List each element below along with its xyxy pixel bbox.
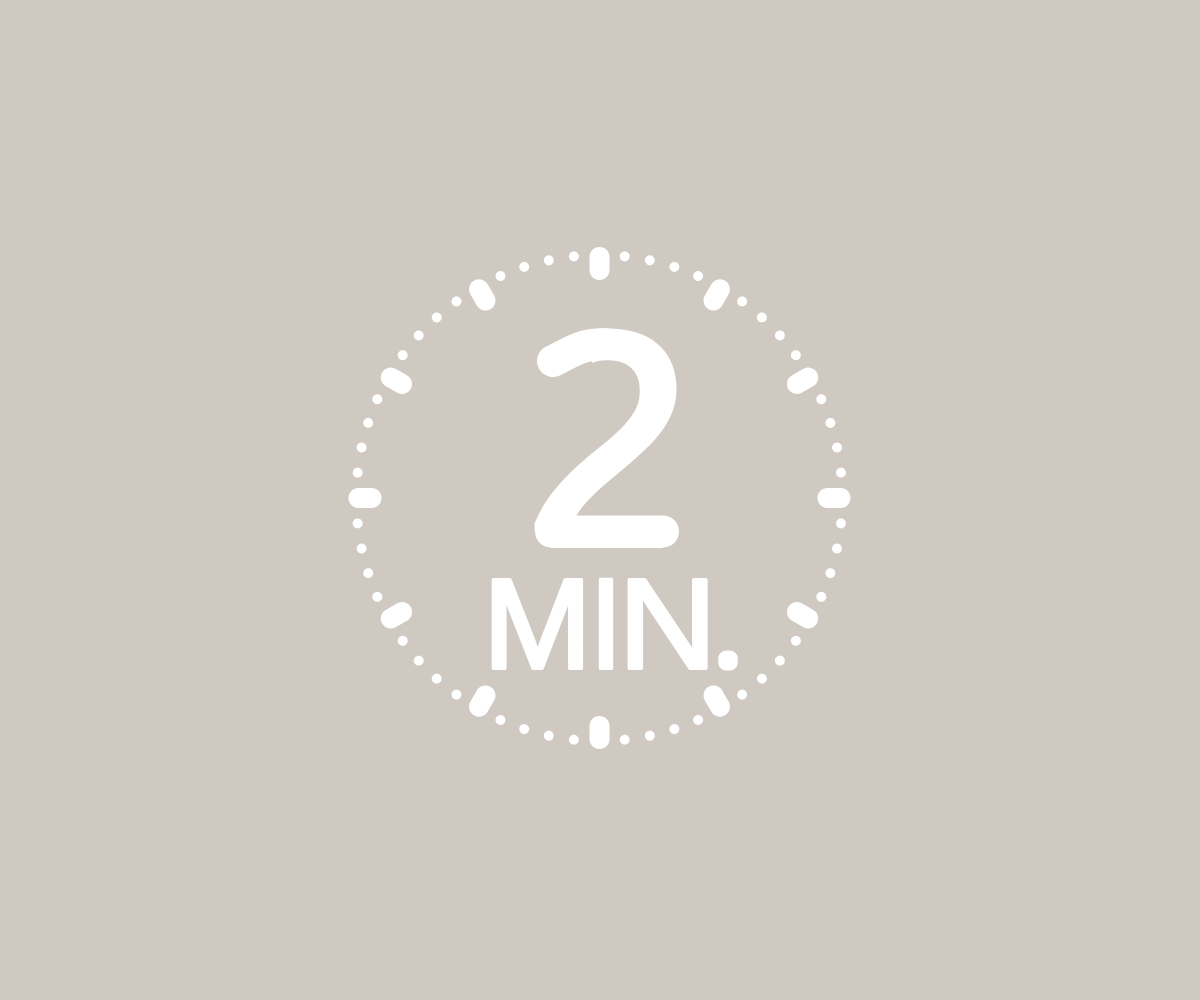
numeral: 2: 2 <box>524 273 690 607</box>
label: MIN.: I <box>590 552 622 695</box>
minute dots <box>352 251 846 745</box>
label: MIN.: N <box>619 553 717 695</box>
hour tick marks <box>358 257 840 739</box>
infographic canvas <box>348 247 850 749</box>
numeral: 2 <box>534 328 679 548</box>
label: MIN.: M <box>483 553 592 696</box>
label: MIN.: . <box>723 630 733 670</box>
icon: stopwatch dial <box>352 251 846 745</box>
label: MIN. <box>483 552 733 696</box>
